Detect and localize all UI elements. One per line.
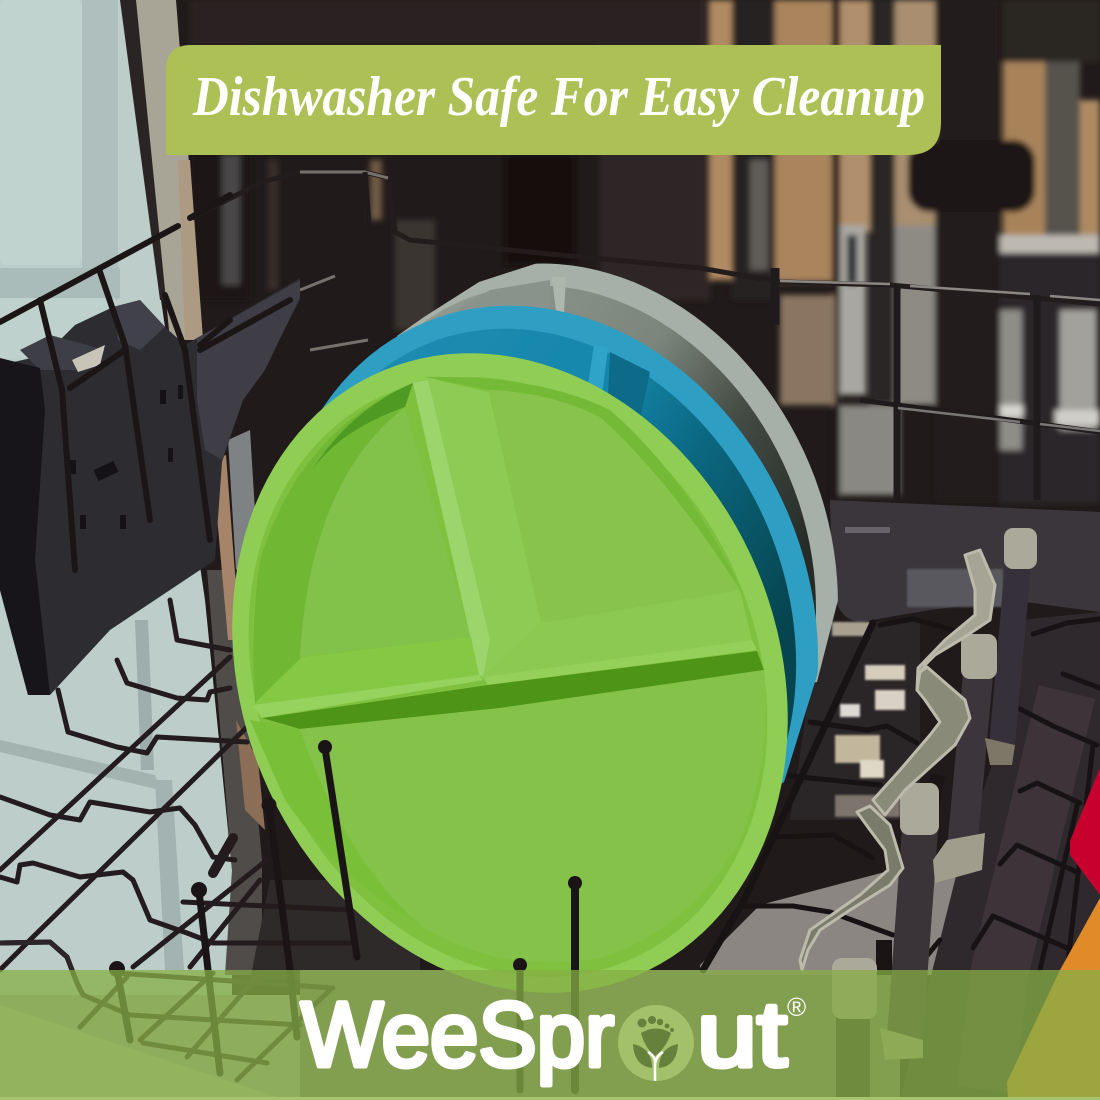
wordmark end: ut [697,984,787,1086]
orange utensil [1007,898,1100,1100]
front prongs [109,740,582,1090]
background: door and wall [0,0,420,1000]
upper left compartment wall [253,383,471,703]
title text: Dishwasher Safe For Easy Cleanup [192,66,925,128]
prong stems [853,565,1018,1100]
logo icon: sprout and footprint in letter o [618,1005,694,1081]
blue plate divider [588,346,608,390]
dish rack clips on left [0,195,300,695]
grey plate divider [553,286,566,312]
vertical divider ridge [413,378,541,677]
registered mark: ® [787,992,806,1022]
lower compartment floor [300,670,766,962]
dark groove below divider [262,651,764,729]
prong caps [832,528,1037,1019]
upper right compartment floor [489,390,740,623]
title banner [166,45,941,155]
red utensil [1070,768,1100,895]
logo: WeeSprout [301,984,806,1086]
footer underlay: rack floor [0,942,900,1100]
ribbon supports [800,550,995,970]
rear dishwasher rack [192,172,1100,500]
footer bottom edge [0,1097,1100,1100]
horizontal divider ridge [483,590,752,677]
plate: grey [397,264,838,682]
upper right compartment wall [425,377,742,623]
wordmark start: WeeSpr [301,984,614,1086]
upper left compartment floor [300,407,471,657]
plate: blue [322,306,818,784]
footer band [0,970,1100,1100]
footer lower-left plate shape [0,1005,277,1100]
plate: green divided plate [136,267,884,1079]
lower rack wires left [0,600,350,1020]
prongs with caps [800,528,1037,1100]
lower right tube and floor [700,500,1100,1100]
